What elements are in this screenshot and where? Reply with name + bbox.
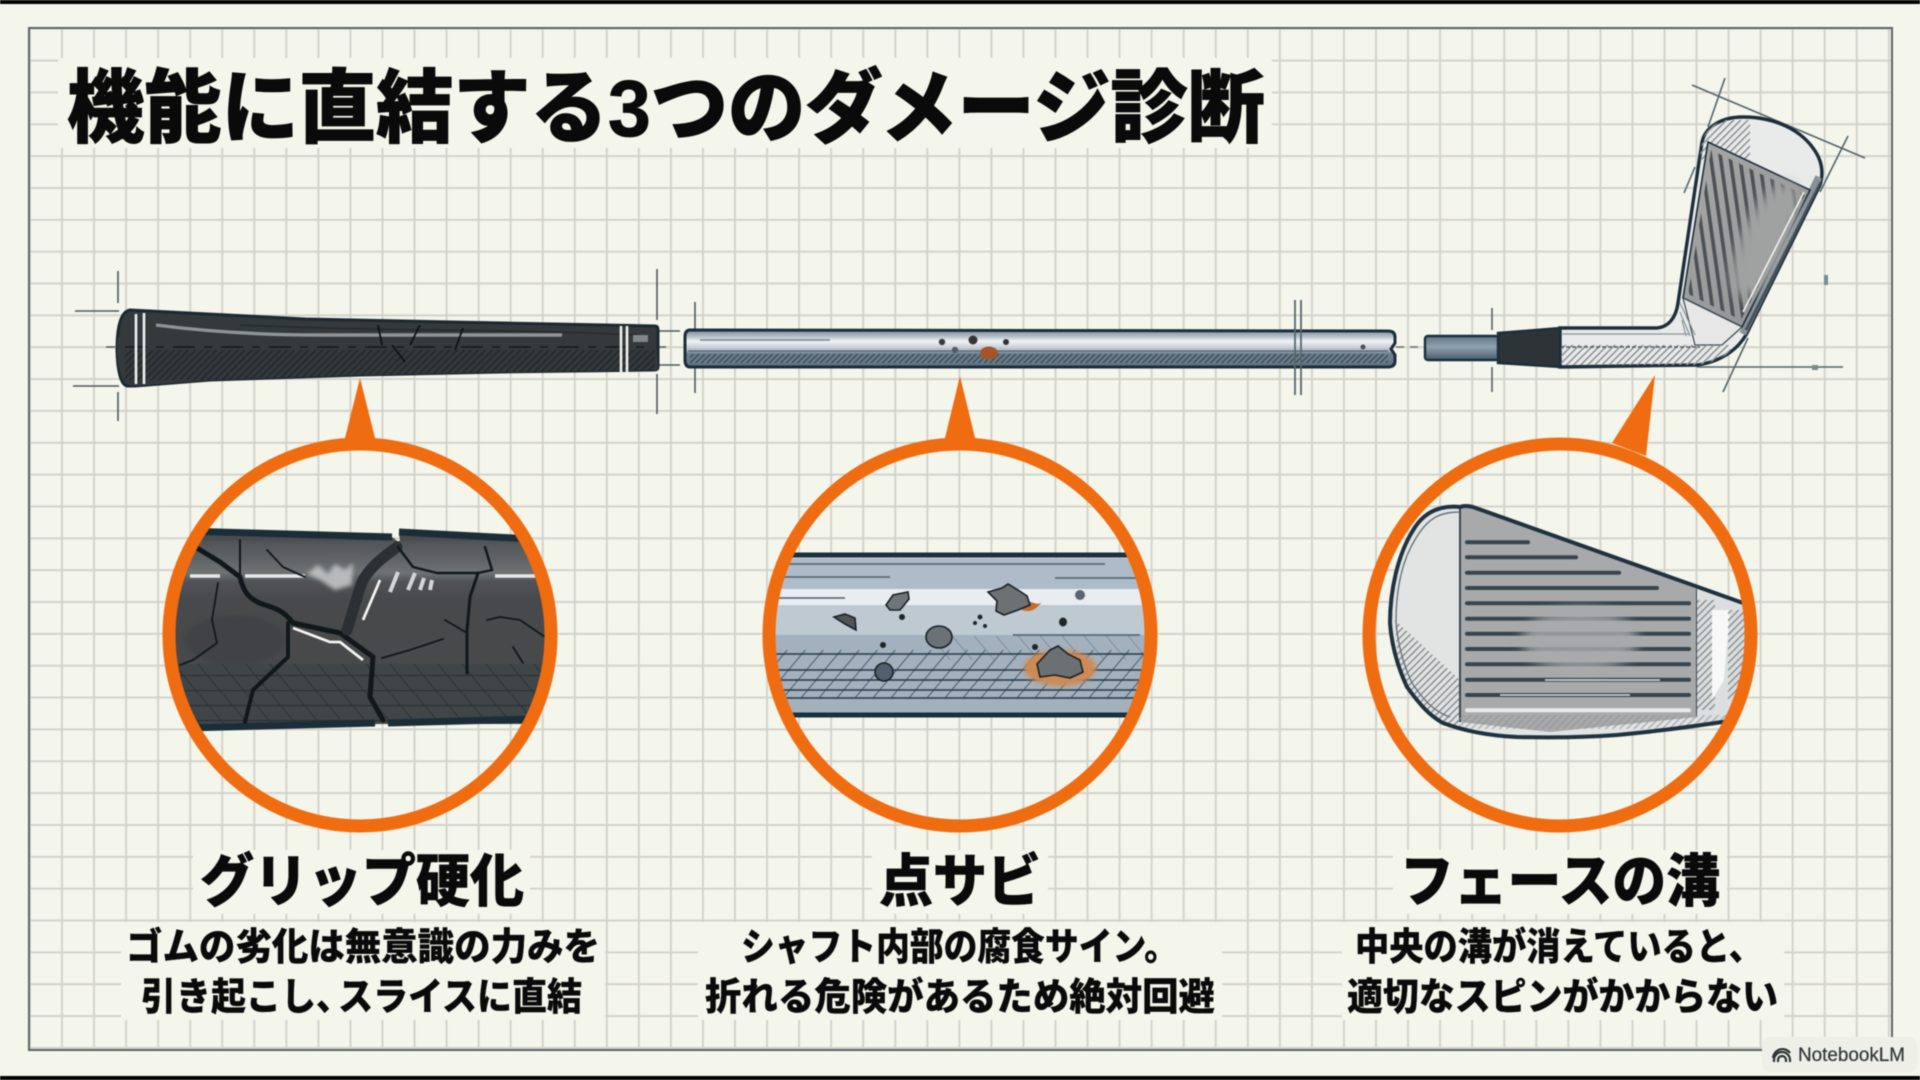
- description: face grooves: [1342, 922, 1784, 1020]
- iron face close-up illustration: [1387, 503, 1745, 740]
- worn centre of the face: [1522, 608, 1638, 672]
- heading: spot rust: 点サビ: [879, 850, 1041, 914]
- description: spot rust: 折れる危険があるため絶対回避: [705, 976, 1215, 1019]
- rust pits: [834, 584, 1096, 686]
- orange ring: [1369, 444, 1751, 826]
- orange pointer: [944, 376, 976, 442]
- description: spot rust: [698, 922, 1222, 1020]
- description: grip hardening: 引き起こし、スライスに直結: [141, 977, 582, 1019]
- callout 3: iron face magnifier: [1369, 375, 1767, 826]
- description: grip hardening: [121, 922, 605, 1020]
- rust spots on shaft: [939, 336, 1366, 360]
- orange ring: [169, 444, 551, 826]
- heading: face grooves: フェースの溝: [1400, 850, 1720, 914]
- orange ring: [769, 444, 1151, 826]
- NotebookLM badge: NotebookLM: [1798, 1045, 1905, 1066]
- club diagram: grip: [73, 269, 695, 421]
- cracks: [180, 540, 545, 722]
- description: spot rust: シャフト内部の腐食サイン。: [741, 927, 1178, 969]
- callout 2: shaft magnifier: [769, 376, 1151, 826]
- top black bar: [0, 0, 1920, 4]
- bottom black bar: [0, 1076, 1920, 1080]
- orange pointer: [344, 378, 376, 442]
- grip close-up illustration: [150, 530, 570, 730]
- icon: NotebookLM mark: [1773, 1049, 1790, 1062]
- club diagram: shaft: [685, 300, 1395, 395]
- description: face grooves: 中央の溝が消えていると、: [1355, 926, 1763, 969]
- NotebookLM badge: [1762, 1037, 1917, 1072]
- score lines: [1467, 542, 1689, 695]
- callout 1: grip magnifier: [150, 378, 570, 826]
- description: grip hardening: ゴムの劣化は無意識の力みを: [126, 926, 600, 969]
- heading: grip hardening: グリップ硬化: [200, 850, 524, 914]
- club diagram: iron head: [1396, 78, 1865, 392]
- shaft close-up illustration: [770, 555, 1150, 715]
- title: 機能に直結する3つのダメージ診断: [67, 64, 1265, 153]
- description: face grooves: 適切なスピンがかからない: [1347, 976, 1778, 1019]
- orange pointer: [1612, 375, 1655, 456]
